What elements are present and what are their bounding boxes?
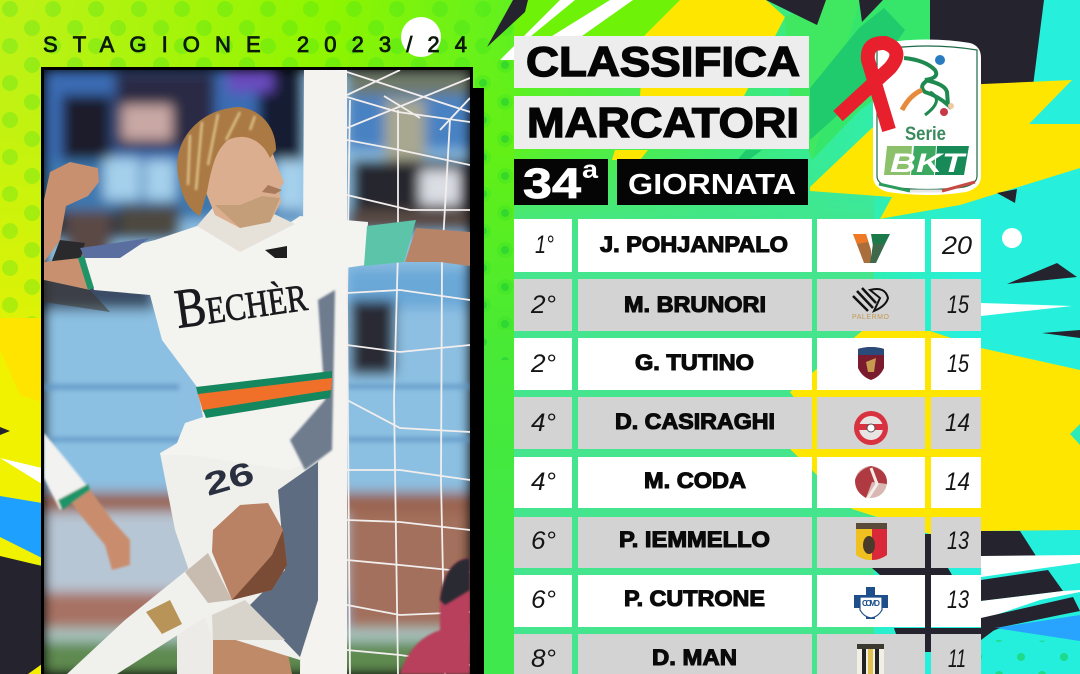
club badge: Sudtirol xyxy=(854,411,888,445)
right side shards xyxy=(981,189,1080,338)
row 2: 2° xyxy=(530,291,556,319)
sleeve shade xyxy=(80,238,150,258)
goal net xyxy=(347,70,470,674)
green panel behind title xyxy=(785,0,860,160)
row 1: J. POHJANPALO xyxy=(600,232,788,257)
matchday number xyxy=(514,156,608,208)
season label: STAGIONE 2023/24 xyxy=(43,32,467,57)
neck and head xyxy=(177,107,295,252)
matchday label xyxy=(617,159,808,205)
outstretched arm xyxy=(405,228,470,266)
teammate arm xyxy=(44,433,130,570)
row 8 xyxy=(514,634,981,674)
figure mark xyxy=(902,55,954,116)
sponsor text: BECHÈR xyxy=(171,261,311,341)
shirt shadow xyxy=(290,290,335,470)
goalkeeper background figure xyxy=(400,558,470,674)
logo wordmark Serie: Serie xyxy=(905,124,946,145)
shield xyxy=(873,40,981,195)
row 4 xyxy=(514,397,981,449)
goal post xyxy=(300,70,347,674)
seat rows xyxy=(44,384,470,442)
row 7: 13 xyxy=(947,586,969,614)
row 6 xyxy=(514,517,981,568)
decorative white dot xyxy=(401,17,441,57)
row 4: 4° xyxy=(531,409,556,437)
yellow lower burst xyxy=(790,331,1080,534)
row 5 xyxy=(514,457,981,508)
club badge: Cosenza xyxy=(858,347,884,380)
row 2 xyxy=(514,279,981,331)
white stripes xyxy=(500,0,633,60)
row 1: 20 xyxy=(941,232,972,260)
teal band xyxy=(810,8,905,140)
club badge: Parma xyxy=(857,644,884,674)
thigh xyxy=(212,503,287,600)
club badge: Como: COMO xyxy=(862,599,880,608)
row 1 xyxy=(514,219,981,272)
club badge: Palermo: PALERMO xyxy=(852,314,890,321)
club badge: Catanzaro xyxy=(856,523,887,560)
club badge: Venezia xyxy=(853,234,890,263)
row 3: 15 xyxy=(947,350,969,378)
player photo xyxy=(44,70,470,674)
row 2: 15 xyxy=(947,291,969,319)
matchday label: GIORNATA xyxy=(628,169,796,201)
row 5: 14 xyxy=(945,468,970,496)
row 4: D. CASIRAGHI xyxy=(615,409,775,434)
title line 2: MARCATORI xyxy=(527,99,799,146)
season label xyxy=(43,17,467,57)
dark shards top xyxy=(487,0,1044,90)
row 5: M. CODA xyxy=(644,468,746,493)
photo frame xyxy=(41,67,473,674)
row 6: P. IEMMELLO xyxy=(619,527,770,552)
sleeve green cuff xyxy=(78,256,94,290)
BKT tiles xyxy=(884,146,969,178)
dark vertical bar between table columns xyxy=(925,534,931,652)
yellow burst behind badge xyxy=(810,80,1080,219)
shirt number: 26 xyxy=(200,454,258,503)
torso shirt xyxy=(85,216,368,470)
tricolour arc xyxy=(879,182,975,191)
Serie BKT logo xyxy=(838,40,981,195)
row 4: 14 xyxy=(945,409,970,437)
matchday number: 34 xyxy=(523,160,581,208)
far leg and sock xyxy=(177,618,292,674)
club badge: Palermo xyxy=(852,288,890,321)
row 8: D. MAN xyxy=(652,645,737,670)
collar mark xyxy=(265,246,287,258)
row 8: 11 xyxy=(948,645,966,673)
row 6: 6° xyxy=(531,527,556,555)
red ribbon xyxy=(838,43,896,130)
lower right shards xyxy=(872,530,1080,674)
armband xyxy=(364,220,416,266)
row 7: 6° xyxy=(531,586,556,614)
row 6: 13 xyxy=(947,527,969,555)
row 7 xyxy=(514,575,981,627)
top-centre yellow shard xyxy=(640,0,785,96)
shirt sash xyxy=(196,371,332,418)
row 3: 2° xyxy=(530,350,556,378)
club badge: Cremonese xyxy=(855,466,887,498)
raised arm and fist xyxy=(44,162,110,312)
photo drop shadow xyxy=(470,88,484,674)
row 8: 8° xyxy=(531,645,556,673)
club badge: Como xyxy=(854,587,888,619)
matchday number: a xyxy=(582,156,599,184)
title line 1: CLASSIFICA xyxy=(526,38,800,85)
row 3 xyxy=(514,338,981,390)
sock xyxy=(67,553,232,674)
row 1: 1° xyxy=(535,231,554,259)
left yellow and blue shards xyxy=(0,318,42,674)
row 5: 4° xyxy=(531,468,556,496)
shorts xyxy=(160,430,320,660)
row 3: G. TUTINO xyxy=(635,350,754,375)
player xyxy=(44,107,470,674)
row 2: M. BRUNORI xyxy=(624,292,766,317)
stadium background xyxy=(44,70,470,674)
BKT tiles: BKT xyxy=(890,148,967,178)
row 7: P. CUTRONE xyxy=(624,586,765,611)
